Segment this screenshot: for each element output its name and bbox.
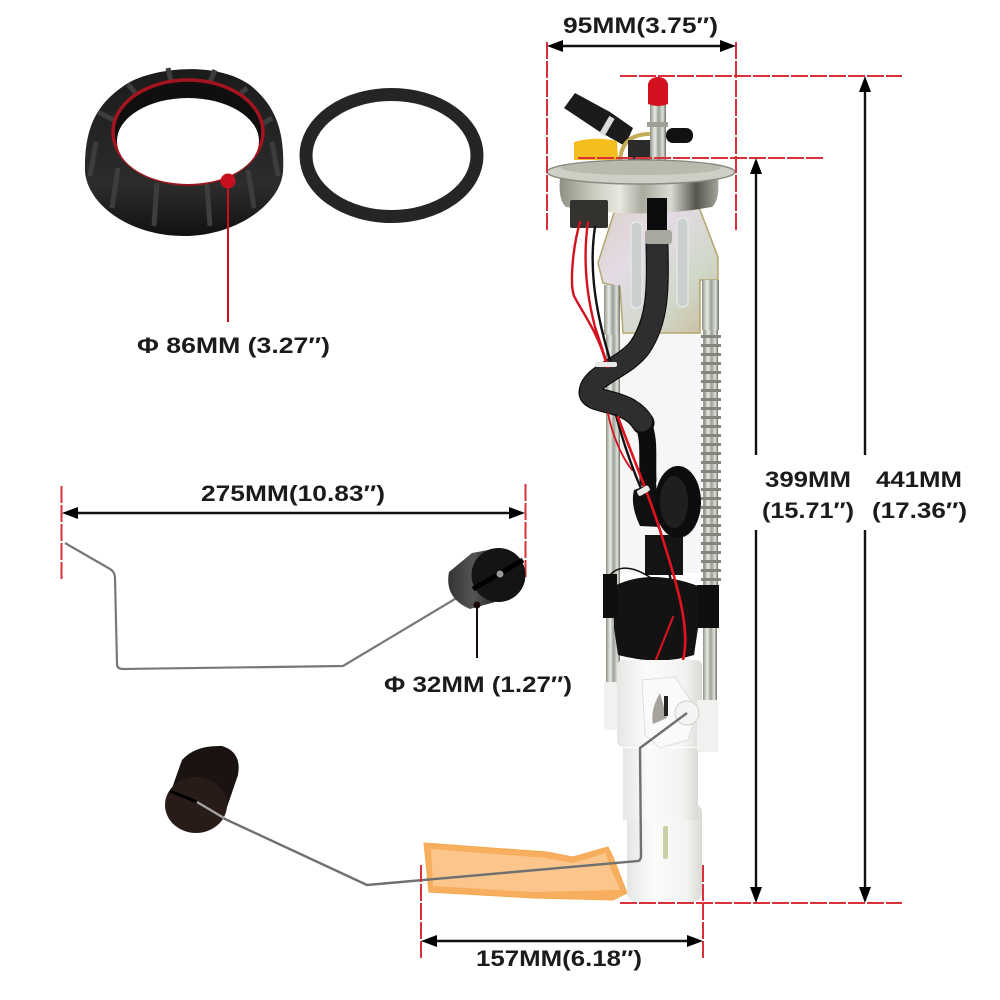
measure: float diameter [474,602,480,658]
dimension: 157mm [421,865,703,958]
float assembly lower [165,713,687,885]
fuel pump assembly [424,77,735,902]
float upper [448,548,526,609]
label: ring diameter: Φ 86MM (3.27″) [137,333,330,358]
locking ring ribs [90,68,278,226]
dimension: 399mm [750,158,762,903]
flange [547,160,735,214]
inner pale background [620,333,702,573]
rubber gasket [306,94,477,216]
fuel hose [590,198,667,480]
top nozzle [647,77,693,160]
label: 95mm: 95MM(3.75″) [563,13,718,38]
label: 399mm [762,467,854,523]
label: 441mm [872,467,967,523]
hose clamp [645,230,672,244]
label: 441mm: 441MM [876,467,962,492]
label: 399mm: (15.71″) [762,498,854,523]
label: 441mm: (17.36″) [872,498,967,523]
plastic housing [604,660,718,902]
guide rods [606,280,717,700]
pump body [603,466,719,660]
dimension: 441mm [859,76,871,903]
yellow cap [574,139,618,160]
label: float diameter: Φ 32MM (1.27″) [384,672,572,697]
spring [704,330,718,585]
guide lines: top, flange and bottom [578,76,902,903]
dimension: 95mm [547,40,736,231]
label: 275mm: 275MM(10.83″) [201,481,385,506]
fuel level sender [642,677,699,748]
electrical connector [564,93,650,160]
strainer [424,843,627,900]
label: 157mm: 157MM(6.18″) [476,946,642,971]
float lower [165,746,239,833]
bottom connector [570,200,608,228]
label: 399mm: 399MM [765,467,851,492]
float arm lower [195,713,687,885]
locking ring [85,68,283,236]
cable ties [595,362,651,497]
dimension: 275mm [62,484,526,579]
wires [572,222,685,667]
measure: ring diameter [220,174,236,322]
float arm upper [65,543,526,669]
bracket [598,200,719,335]
